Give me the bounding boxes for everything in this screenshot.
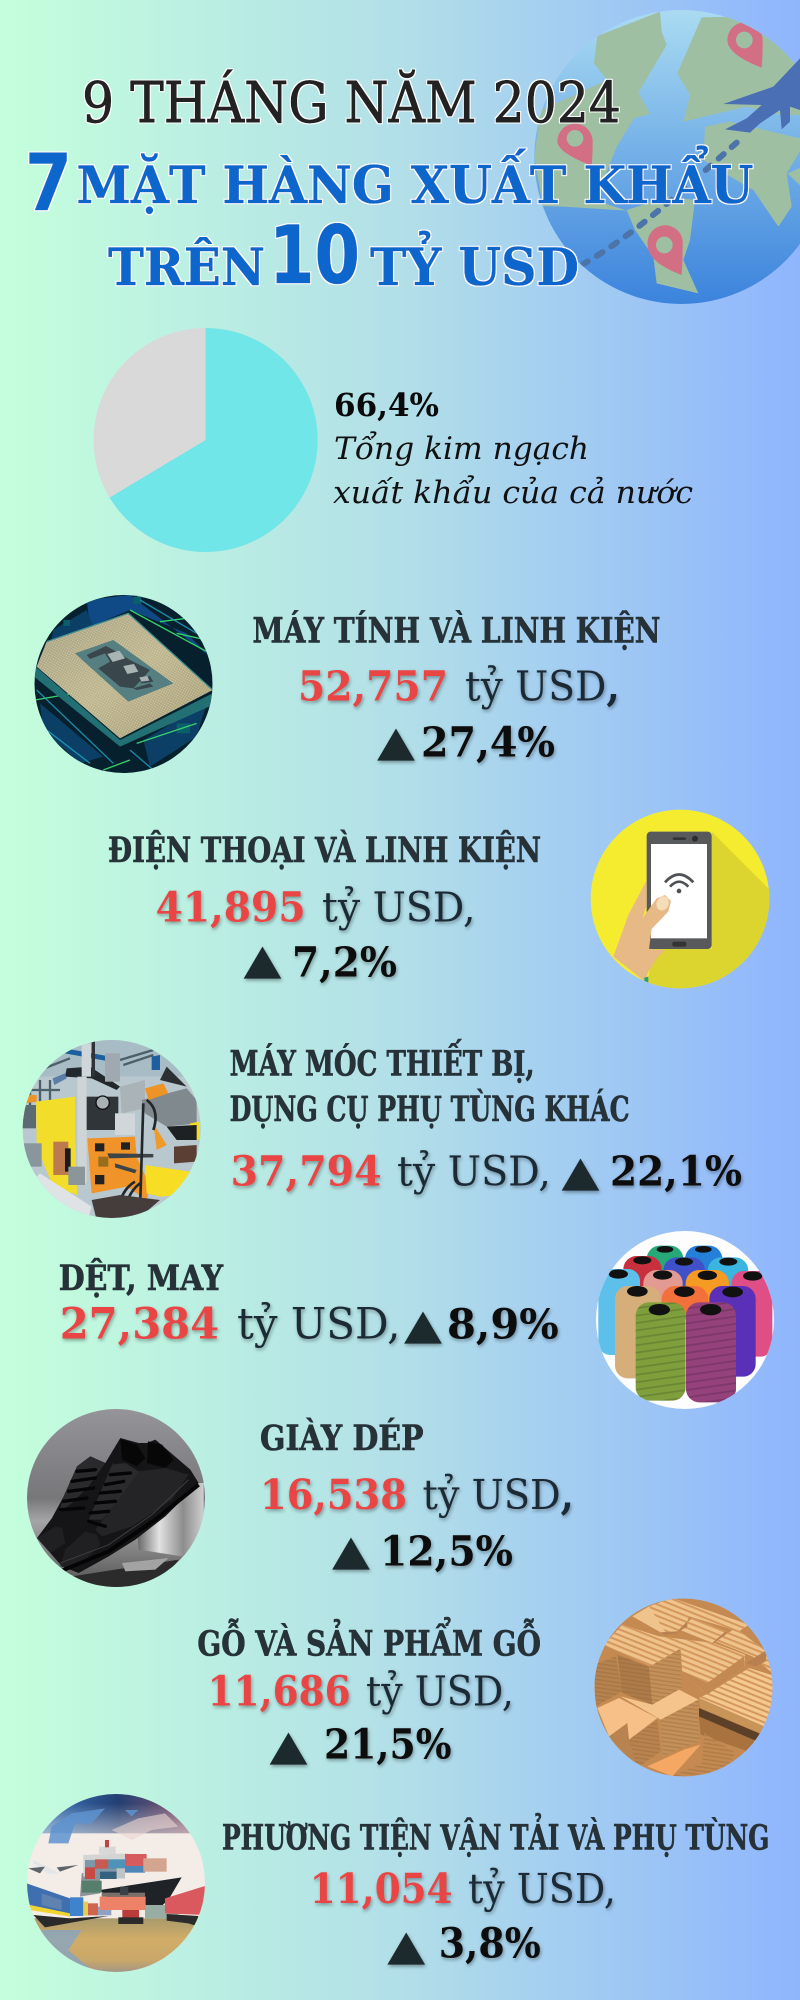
plane	[33, 1860, 60, 1874]
value: wood: 11,686	[208, 1667, 351, 1715]
icon: globe with pins, plane and route	[530, 7, 800, 307]
title words: billion USD: TỶ USD	[370, 232, 579, 298]
photo: logistics scene	[25, 1790, 212, 1978]
value: textiles: tỷ USD,	[237, 1299, 400, 1349]
value: transport: 3,8%	[439, 1920, 541, 1968]
photo: yarn spools	[596, 1231, 774, 1409]
title	[25, 70, 754, 302]
label: wood: GỖ VÀ SẢN PHẨM GỖ	[197, 1616, 541, 1665]
item 1: computers	[30, 590, 660, 780]
value: machinery: ▲	[562, 1146, 600, 1196]
item 2: phones	[108, 805, 775, 995]
big number 10: 10	[269, 209, 360, 302]
value: wood: 21,5%	[324, 1721, 452, 1769]
item 7: transport	[25, 1790, 769, 1978]
value: machinery: 37,794	[231, 1147, 382, 1195]
item 5: footwear	[22, 1403, 574, 1593]
value: wood	[208, 1667, 514, 1770]
value: transport: ▲	[387, 1920, 426, 1970]
value: phones: 41,895	[156, 884, 306, 932]
title word: above: TRÊN	[108, 238, 265, 298]
value: computers: 27,4%	[421, 719, 555, 767]
value: computers: ▲	[377, 716, 416, 766]
value: wood: tỷ USD,	[366, 1667, 514, 1715]
value: textiles: 27,384	[60, 1299, 219, 1349]
item 3: machinery	[20, 1037, 742, 1223]
ground	[34, 1918, 198, 1972]
photo: stacked timber	[594, 1598, 772, 1776]
label: machinery	[230, 1038, 630, 1130]
photo: factory machinery	[20, 1037, 207, 1223]
label: phones: ĐIỆN THOẠI VÀ LINH KIỆN	[108, 828, 541, 871]
value: phones: ▲	[244, 934, 282, 984]
label: textiles: DỆT, MAY	[59, 1256, 223, 1299]
pie chart: 66.4% share	[94, 328, 318, 552]
title line: period: 9 THÁNG NĂM 2024	[82, 70, 621, 136]
label: computers: MÁY TÍNH VÀ LINH KIỆN	[252, 609, 660, 652]
value: computers: tỷ USD,	[465, 663, 620, 711]
value: footwear	[260, 1471, 574, 1576]
label: machinery: MÁY MÓC THIẾT BỊ,	[230, 1038, 535, 1084]
photo: microchip	[34, 595, 212, 773]
value: wood: ▲	[270, 1720, 308, 1770]
share label line 1: Tổng kim ngạch	[334, 430, 589, 467]
train	[27, 1883, 70, 1917]
value: textiles: 8,9%	[447, 1300, 559, 1348]
share label line 2: xuất khẩu của cả nước	[333, 474, 693, 511]
value: machinery: tỷ USD,	[397, 1147, 551, 1195]
photo: hand holding phone	[590, 810, 770, 988]
value: machinery: 22,1%	[610, 1147, 742, 1195]
value: machinery	[231, 1146, 742, 1196]
photo: black sneakers	[27, 1409, 205, 1587]
value: footwear: 16,538	[260, 1471, 407, 1519]
value: transport: tỷ USD,	[468, 1865, 616, 1913]
item 4: textiles	[59, 1225, 780, 1415]
container on forklift	[100, 1897, 146, 1910]
value: computers: 52,757	[298, 663, 448, 711]
value: transport	[310, 1865, 616, 1970]
value: footwear: ▲	[332, 1526, 371, 1574]
share value: 66,4%	[334, 386, 439, 424]
pie caption	[333, 386, 693, 511]
value: footwear: tỷ USD,	[422, 1471, 574, 1519]
value: textiles	[60, 1299, 559, 1349]
value: phones	[156, 884, 476, 987]
value: transport: 11,054	[310, 1865, 453, 1913]
value: footwear: 12,5%	[380, 1528, 513, 1576]
ship hull	[102, 1877, 182, 1905]
value: phones: 7,2%	[292, 939, 397, 987]
truck	[165, 1886, 205, 1915]
title line: export items: MẶT HÀNG XUẤT KHẨU	[76, 146, 754, 216]
value: textiles: ▲	[404, 1300, 443, 1348]
value: phones: tỷ USD,	[322, 884, 476, 932]
big number 7: 7	[25, 139, 72, 229]
value: computers	[298, 663, 620, 767]
label: footwear: GIÀY DÉP	[260, 1417, 424, 1459]
item 6: wood	[197, 1593, 779, 1783]
label: machinery: DỤNG CỤ PHỤ TÙNG KHÁC	[230, 1088, 630, 1130]
